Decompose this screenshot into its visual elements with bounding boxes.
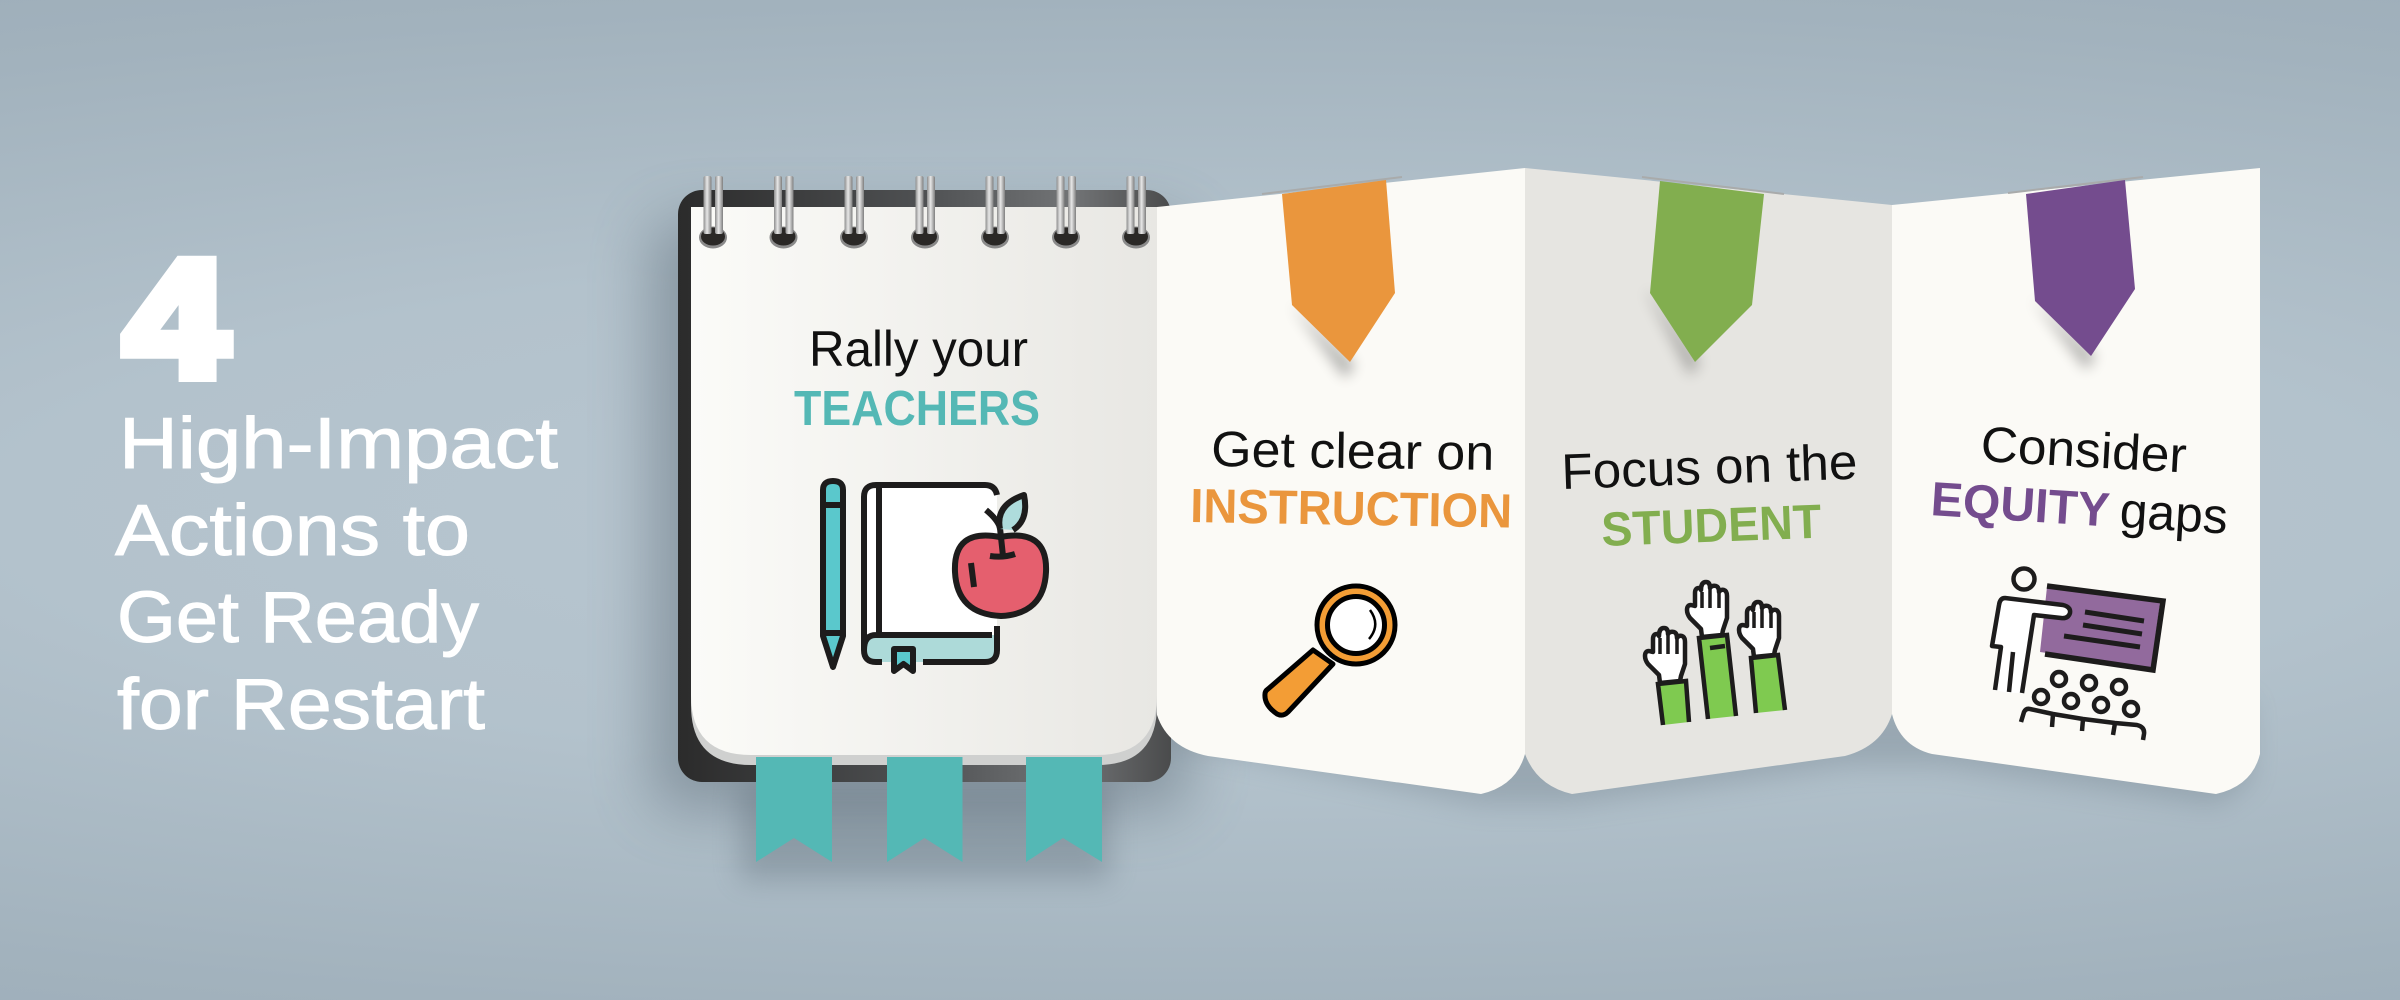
cast shadows	[650, 220, 2250, 880]
icon: presenter with audience	[1992, 568, 2163, 740]
fold 3 page	[1892, 168, 2260, 794]
title text: Actions to	[115, 491, 470, 571]
panel: student	[1525, 168, 1892, 794]
heading: rally your teachers: TEACHERS	[794, 382, 1040, 436]
heading: consider equity gaps	[1929, 416, 2230, 545]
slit	[1262, 177, 1402, 194]
heading: focus on the student	[1560, 434, 1858, 557]
heading: get clear on instruction: INSTRUCTION	[1190, 480, 1513, 539]
icon: apple	[955, 495, 1046, 616]
panel: instruction	[1157, 168, 1525, 794]
title text: High-Impact	[119, 404, 558, 484]
heading: consider equity gaps: EQUITY	[1929, 473, 2111, 538]
heading: consider equity gaps: gaps	[2118, 482, 2230, 545]
notebook back cover	[678, 190, 1171, 782]
orange bookmark shadow	[1296, 312, 1359, 381]
icon: magnifying glass	[1265, 586, 1395, 715]
spiral binding	[699, 176, 1150, 248]
notebook under page	[691, 207, 1157, 765]
green bookmark	[1650, 181, 1764, 362]
heading: get clear on instruction	[1190, 421, 1513, 539]
heading: focus on the student: Focus on the	[1560, 434, 1858, 500]
orange bookmark	[1282, 180, 1395, 362]
purple bookmark	[2026, 180, 2135, 356]
purple bookmark shadow	[2038, 306, 2100, 372]
title block	[115, 227, 558, 745]
heading: consider equity gaps: Consider	[1979, 416, 2188, 483]
numeral 4: 4	[124, 227, 228, 412]
fold 1 page	[1157, 168, 1525, 794]
panel: notebook	[678, 176, 1171, 862]
heading: focus on the student: STUDENT	[1600, 496, 1822, 557]
notebook page	[691, 207, 1157, 755]
title text: Get Ready	[117, 578, 479, 658]
icon: book	[864, 485, 997, 671]
heading: rally your teachers	[794, 321, 1040, 436]
green bookmark shadow	[1646, 290, 1700, 376]
heading: get clear on instruction: Get clear on	[1211, 421, 1495, 481]
icon: pencil	[823, 481, 843, 667]
title text	[115, 404, 558, 745]
title text: for Restart	[117, 665, 485, 745]
teal ribbons	[756, 757, 1102, 862]
icon: raised hands	[1645, 582, 1785, 725]
heading: rally your teachers: Rally your	[809, 321, 1028, 377]
slit	[1642, 177, 1784, 194]
slit	[2008, 177, 2143, 193]
panel: equity	[1892, 168, 2260, 794]
fold 2 page	[1525, 168, 1892, 794]
